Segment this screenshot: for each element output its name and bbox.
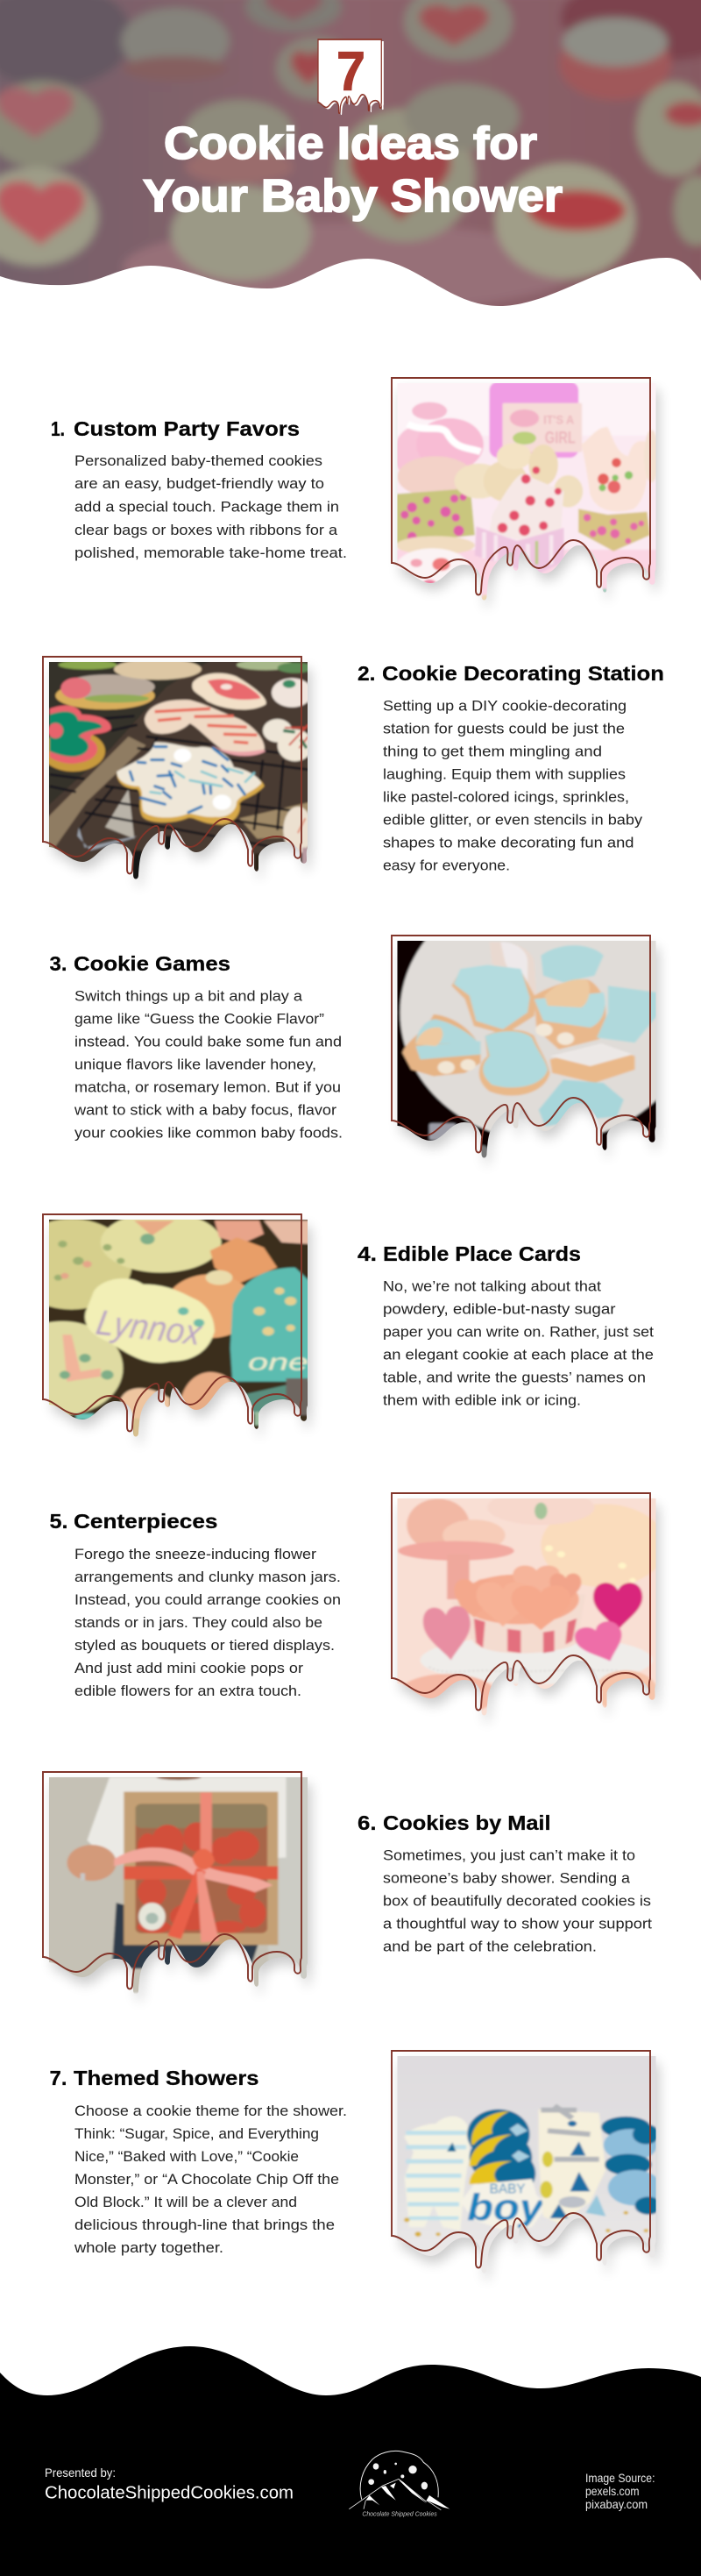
text block 2: like pastel-colored icings, sprinkles,	[383, 789, 629, 805]
text block 3	[74, 987, 343, 1142]
heading 5: Centerpieces	[74, 1510, 217, 1533]
text block 7: Monster,” or “A Chocolate Chip Off the	[74, 2171, 339, 2188]
text block 1	[74, 452, 347, 561]
image 1: pink baby cookies: GIRL	[545, 429, 576, 447]
image 6: gift box of heart cookies	[40, 1771, 326, 2001]
frame 2	[43, 657, 301, 873]
text block 3: want to stick with a baby focus, flavor	[74, 1101, 336, 1119]
heading 4: Edible Place Cards	[383, 1242, 581, 1265]
heading 1: Custom Party Favors	[74, 417, 300, 440]
heading 4: 4.	[358, 1242, 377, 1265]
text block 7: delicious through-line that brings the	[74, 2217, 335, 2233]
text block 2: Setting up a DIY cookie-decorating	[383, 698, 627, 714]
text block 7	[74, 2103, 347, 2256]
text block 4: powdery, edible-but-nasty sugar	[383, 1301, 616, 1317]
image 1: pink baby cookies: IT'S A	[543, 413, 574, 427]
text block 1: add a special touch. Package them in	[74, 498, 339, 516]
heading 1: 1.	[51, 417, 65, 440]
text block 3: game like “Guess the Cookie Flavor”	[74, 1010, 324, 1028]
text block 1: Personalized baby-themed cookies	[74, 452, 322, 469]
text block 2: edible glitter, or even stencils in baby	[383, 812, 643, 828]
icon: number 7 badge: 7	[336, 41, 365, 103]
image 4: personalized name cookies: Lynnox	[93, 1303, 206, 1353]
image 3: baby blue cookies on a plate	[391, 935, 664, 1164]
panel: footer	[0, 2346, 701, 2576]
image source credits	[585, 2471, 655, 2511]
text block 4: table, and write the guests’ names on	[383, 1370, 646, 1385]
text block 1: clear bags or boxes with ribbons for a	[74, 522, 338, 538]
text block 4: them with edible ink or icing.	[383, 1392, 581, 1408]
frame 4	[43, 1214, 301, 1431]
title: Cookie Ideas for	[164, 118, 537, 169]
presented by	[45, 2466, 294, 2502]
text block 5	[74, 1546, 341, 1699]
text block 3: Switch things up a bit and play a	[74, 987, 303, 1005]
image source credits: pexels.com	[585, 2484, 640, 2498]
heading 5: 5.	[49, 1510, 68, 1533]
panel: 1 custom party favors	[51, 377, 669, 611]
heading 7: Themed Showers	[74, 2067, 259, 2089]
image source credits: Image Source:	[585, 2471, 655, 2485]
text block 6: a thoughtful way to show your support	[383, 1915, 652, 1932]
panel: 6 cookies by mail	[40, 1771, 652, 2001]
text block 7: Old Block.” It will be a clever and	[74, 2194, 297, 2210]
icon: number 7 badge	[318, 39, 384, 115]
image 7: baby boy themed cookies	[385, 2049, 670, 2291]
frame 7	[392, 2051, 650, 2267]
text block 5: edible flowers for an extra touch.	[74, 1683, 301, 1699]
heading 3: Cookie Games	[74, 952, 230, 975]
presented by: ChocolateShippedCookies.com	[45, 2483, 294, 2502]
text block 6: box of beautifully decorated cookies is	[383, 1892, 651, 1910]
text block 3: instead. You could bake some fun and	[74, 1033, 342, 1050]
text block 2	[383, 698, 643, 873]
image 7: baby boy themed cookies: BABY	[490, 2181, 526, 2196]
text block 7: whole party together.	[74, 2239, 223, 2256]
text block 5: styled as bouquets or tiered displays.	[74, 1637, 335, 1654]
heading 2: Cookie Decorating Station	[382, 662, 664, 685]
icon: company logo	[349, 2451, 450, 2517]
presented by: Presented by:	[45, 2466, 116, 2480]
text block 6: someone’s baby shower. Sending a	[383, 1869, 631, 1887]
text block 3: matcha, or rosemary lemon. But if you	[74, 1078, 341, 1096]
text block 5: And just add mini cookie pops or	[74, 1660, 303, 1676]
text block 2: easy for everyone.	[383, 857, 510, 873]
panel: 4 edible place cards	[3, 1213, 654, 1448]
panel: 3 cookie games	[49, 935, 664, 1164]
icon: company logo: Chocolate Shipped Cookies	[362, 2509, 437, 2517]
heading 6: 6.	[358, 1811, 377, 1834]
heading 6: Cookies by Mail	[383, 1811, 550, 1834]
text block 4: an elegant cookie at each place at the	[383, 1347, 654, 1363]
text block 6: Sometimes, you just can’t make it to	[383, 1847, 635, 1864]
text block 6	[383, 1847, 652, 1955]
heading 7: 7.	[49, 2067, 67, 2089]
frame 6	[43, 1772, 301, 1989]
text block 5: Instead, you could arrange cookies on	[74, 1591, 341, 1608]
text block 5: arrangements and clunky mason jars.	[74, 1569, 341, 1585]
panel: 7 themed showers	[49, 2049, 670, 2291]
image 2: decorated cookies on a cooling rack	[41, 655, 322, 888]
panel: 5 centerpieces	[49, 1491, 670, 1726]
image 5: heart cookies in a tray	[385, 1491, 670, 1726]
text block 7: Think: “Sugar, Spice, and Everything	[74, 2125, 319, 2142]
panel: 2 cookie decorating station	[41, 655, 664, 888]
frame 5	[392, 1493, 650, 1710]
header background photo	[0, 0, 701, 316]
image source credits: pixabay.com	[585, 2497, 648, 2511]
image 4: personalized name cookies	[42, 1213, 317, 1443]
text block 2: station for guests could be just the	[383, 721, 625, 737]
text block 5: Forego the sneeze-inducing flower	[74, 1546, 316, 1562]
image 1: pink baby cookies	[389, 377, 669, 611]
text block 4	[383, 1278, 654, 1408]
frame 3	[392, 936, 650, 1152]
image 4: personalized name cookies: one	[248, 1348, 308, 1375]
title: Your Baby Shower	[143, 171, 563, 222]
heading 2: 2.	[358, 662, 375, 685]
footer background wave	[0, 2346, 701, 2576]
text block 6: and be part of the celebration.	[383, 1938, 597, 1955]
text block 4: paper you can write on. Rather, just set	[383, 1324, 654, 1340]
text block 7: Nice,” “Baked with Love,” “Cookie	[74, 2148, 299, 2165]
text block 7: Choose a cookie theme for the shower.	[74, 2103, 347, 2119]
panel: header	[0, 0, 701, 316]
text block 5: stands or in jars. They could also be	[74, 1614, 322, 1631]
text block 3: your cookies like common baby foods.	[74, 1124, 343, 1142]
title	[143, 118, 563, 222]
heading 3: 3.	[49, 952, 67, 975]
text block 1: are an easy, budget-friendly way to	[74, 475, 324, 492]
text block 3: unique flavors like lavender honey,	[74, 1056, 316, 1073]
text block 1: polished, memorable take-home treat.	[74, 544, 347, 561]
frame 1	[392, 378, 650, 594]
text block 4: No, we’re not talking about that	[383, 1278, 601, 1294]
text block 2: thing to get them mingling and	[383, 744, 602, 759]
text block 2: shapes to make decorating fun and	[383, 835, 634, 850]
text block 2: laughing. Equip them with supplies	[383, 766, 626, 782]
image 7: baby boy themed cookies: boy	[467, 2187, 545, 2229]
